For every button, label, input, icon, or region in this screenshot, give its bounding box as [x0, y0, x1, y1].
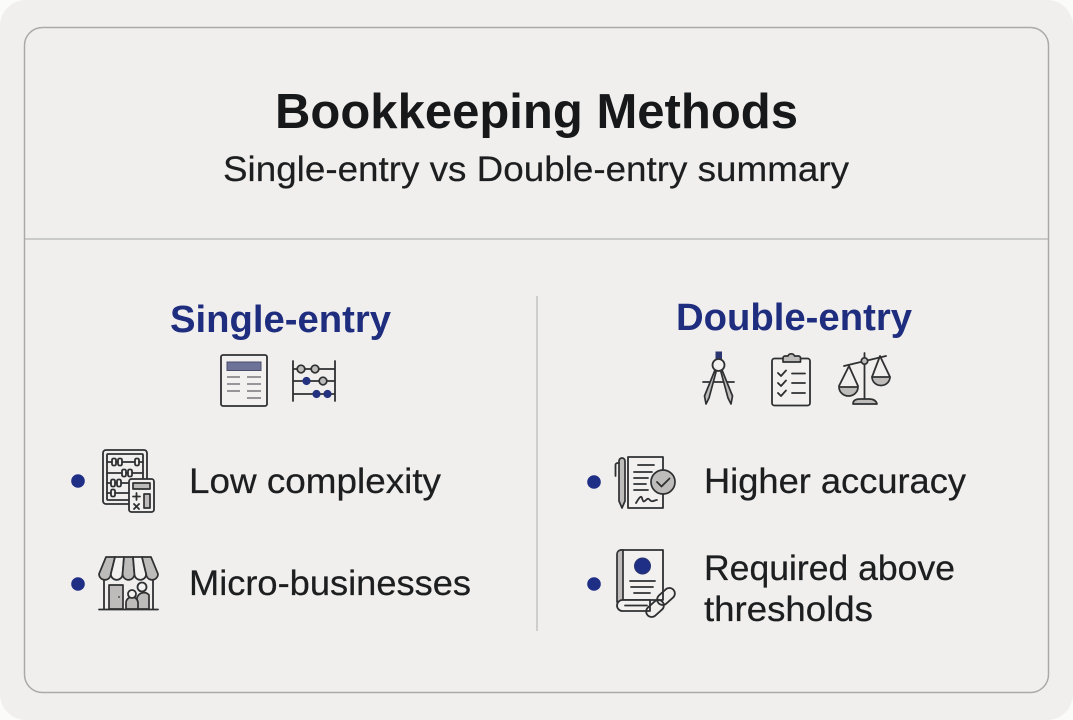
icon: balance scale: [839, 353, 890, 404]
bullet: higher accuracy: [587, 475, 601, 489]
bullet: micro-businesses: [71, 577, 85, 591]
icon: abacus with calculator: [103, 450, 154, 512]
label: higher accuracy: Higher accuracy: [704, 462, 967, 501]
heading: double-entry: Double-entry: [676, 297, 912, 339]
bullet: low complexity: [71, 474, 85, 488]
icon: abacus: [293, 361, 335, 401]
label: required above thresholds: [704, 549, 955, 629]
title: Bookkeeping Methods: [275, 85, 798, 139]
panel: single-entry: [71, 299, 471, 610]
icon: book with chain link: [617, 550, 677, 619]
bullet: required above thresholds: [587, 577, 601, 591]
heading: single-entry: Single-entry: [170, 299, 391, 341]
icon: ledger sheet: [221, 355, 267, 406]
subtitle: Single-entry vs Double-entry summary: [223, 150, 850, 189]
icon: pen and signed document: [616, 457, 675, 508]
label: low complexity: Low complexity: [189, 462, 442, 501]
icon: clipboard checklist: [772, 354, 810, 406]
icon: storefront: [99, 557, 158, 610]
label: micro-businesses: Micro-businesses: [189, 564, 471, 603]
panel: double-entry: [587, 297, 967, 629]
label: required above thresholds: Required above: [704, 549, 955, 588]
icon: drawing compass: [703, 352, 734, 404]
label: required above thresholds: thresholds: [704, 590, 873, 629]
